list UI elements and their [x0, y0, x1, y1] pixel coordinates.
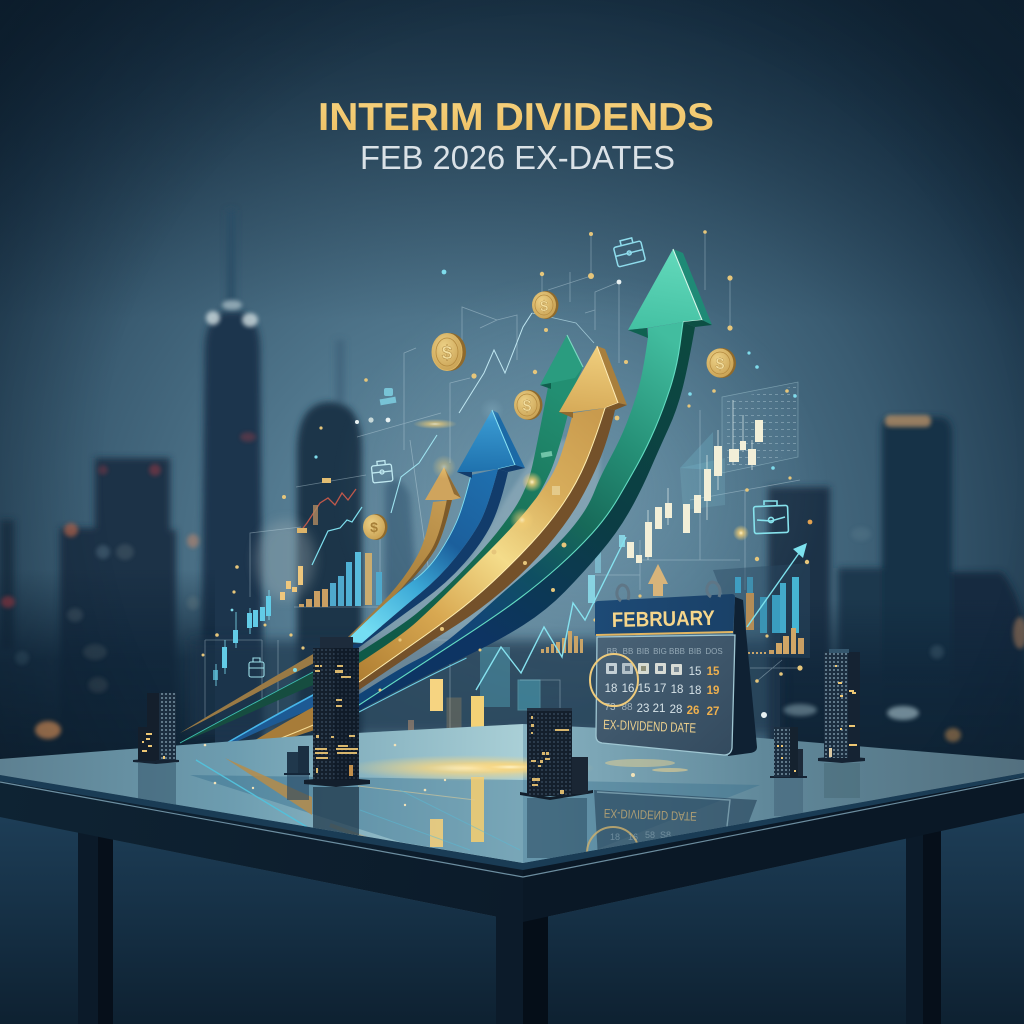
weekday row: DOS	[705, 647, 723, 656]
small gold arrow	[345, 455, 461, 640]
light edge line	[359, 322, 683, 705]
light edge	[359, 408, 605, 682]
big green arrow	[350, 249, 712, 715]
scattered particles	[202, 230, 812, 691]
calendar dates: 73	[604, 702, 616, 713]
icon: briefcase top	[612, 236, 645, 267]
building left pair	[133, 693, 179, 764]
calendar dates: 28	[670, 704, 682, 716]
calendar dates: 21	[653, 703, 665, 715]
gold arrow	[350, 346, 627, 696]
calendar dates: 88	[621, 702, 633, 713]
holographic grid lines	[205, 232, 800, 740]
calendar dates: 15	[689, 666, 701, 678]
front face	[350, 322, 683, 710]
icon: briefcase right	[754, 501, 788, 534]
calendar dates: 26	[687, 705, 699, 717]
glass table top: EX-DIVIDEND DATE	[604, 806, 697, 823]
table legs	[78, 825, 941, 1024]
arrow tails	[180, 638, 340, 757]
glass table top: 18	[610, 832, 620, 842]
calendar	[590, 582, 757, 756]
icon: briefcase left	[371, 460, 393, 483]
chart: right bar panel	[713, 543, 810, 658]
icon: small stacked block	[380, 388, 396, 405]
front face	[345, 469, 498, 643]
coin 4	[363, 514, 388, 540]
calendar dates: 16	[622, 683, 634, 695]
cyan and white particles	[231, 270, 797, 718]
coins	[363, 291, 736, 540]
chart: bar chart left	[299, 552, 382, 607]
chart: right grid panel	[680, 382, 798, 510]
coin 5: $	[716, 356, 725, 373]
coin 3: $	[523, 398, 532, 415]
horizon haze and bokeh lights	[1, 300, 1024, 742]
coin 1	[432, 333, 466, 371]
coin 2	[532, 291, 558, 319]
coin 4: $	[370, 519, 378, 535]
calendar dates: 23	[637, 703, 649, 715]
coin 2: $	[540, 298, 549, 315]
subtitle: FEB 2026 EX-DATES	[360, 139, 675, 176]
low city darkness	[0, 570, 1024, 770]
miniature buildings	[133, 637, 865, 800]
calendar dates: 15	[638, 683, 650, 695]
title	[318, 96, 714, 176]
building right tall	[818, 649, 865, 763]
chart: candlesticks left	[213, 566, 303, 686]
building center	[520, 708, 593, 800]
chart: small gold bars	[541, 631, 583, 653]
table front band	[0, 773, 1024, 922]
calendar body	[596, 635, 735, 755]
calendar dates	[604, 666, 720, 718]
icon: small gold arrow	[648, 564, 668, 596]
dark lower layer behind holographic charts	[190, 640, 780, 735]
table	[0, 724, 1024, 1024]
main heading: INTERIM DIVIDENDS	[318, 96, 714, 139]
calendar dates: 27	[707, 706, 719, 718]
glowing particles	[413, 398, 749, 541]
blue arrow	[345, 410, 525, 654]
top sky shade	[0, 0, 1024, 320]
hologram panels and zig-zag line	[408, 537, 626, 776]
coin 5	[706, 348, 736, 378]
building small back	[284, 746, 310, 775]
weekday row: BIB	[637, 647, 649, 656]
medium green arrow	[350, 335, 583, 670]
weekday row: BIB	[689, 647, 701, 656]
central light haze behind chart	[330, 270, 830, 710]
calendar dates: 17	[654, 683, 666, 695]
area below table	[0, 813, 1024, 1024]
glass table top: 16	[628, 832, 638, 842]
ex-dividend label: EX-DIVIDEND DATE	[603, 717, 696, 736]
chart: cyan and red trend lines	[297, 313, 594, 565]
month label: FEBRUARY	[612, 607, 715, 632]
glass table top	[0, 724, 1024, 863]
coin 3	[514, 390, 542, 420]
head	[559, 346, 618, 412]
calendar back stand	[728, 597, 757, 756]
head	[457, 410, 515, 472]
dark outer side	[350, 322, 695, 715]
calendar dates: 18	[605, 683, 617, 695]
weekday row: BIG	[653, 647, 667, 656]
light gap behind arrow bands	[352, 440, 600, 702]
brown side	[350, 408, 615, 696]
date squares row	[606, 663, 682, 675]
weekday row: BB	[623, 647, 633, 656]
weekday row: BBB	[669, 647, 685, 656]
calendar dates: 19	[707, 685, 719, 697]
highlight circle	[590, 654, 638, 706]
coin 1: $	[442, 343, 453, 364]
dark side	[350, 469, 508, 654]
weekday row: BB	[607, 647, 617, 656]
building main	[304, 637, 370, 787]
arrow head	[628, 249, 702, 330]
chart: white candlesticks	[588, 400, 763, 603]
weekday row	[607, 647, 723, 656]
calendar header	[595, 594, 735, 636]
gold front face	[350, 408, 605, 688]
glass table top: 58	[645, 830, 655, 840]
building right small	[770, 727, 807, 778]
calendar dates: 18	[689, 685, 701, 697]
glass table top: S8	[660, 830, 671, 840]
blurred city skyline	[0, 210, 1024, 770]
calendar dates: 15	[707, 666, 720, 678]
calendar dates: 18	[671, 684, 683, 696]
icon: briefcase lower left	[249, 658, 264, 677]
calendar rings	[617, 582, 720, 601]
